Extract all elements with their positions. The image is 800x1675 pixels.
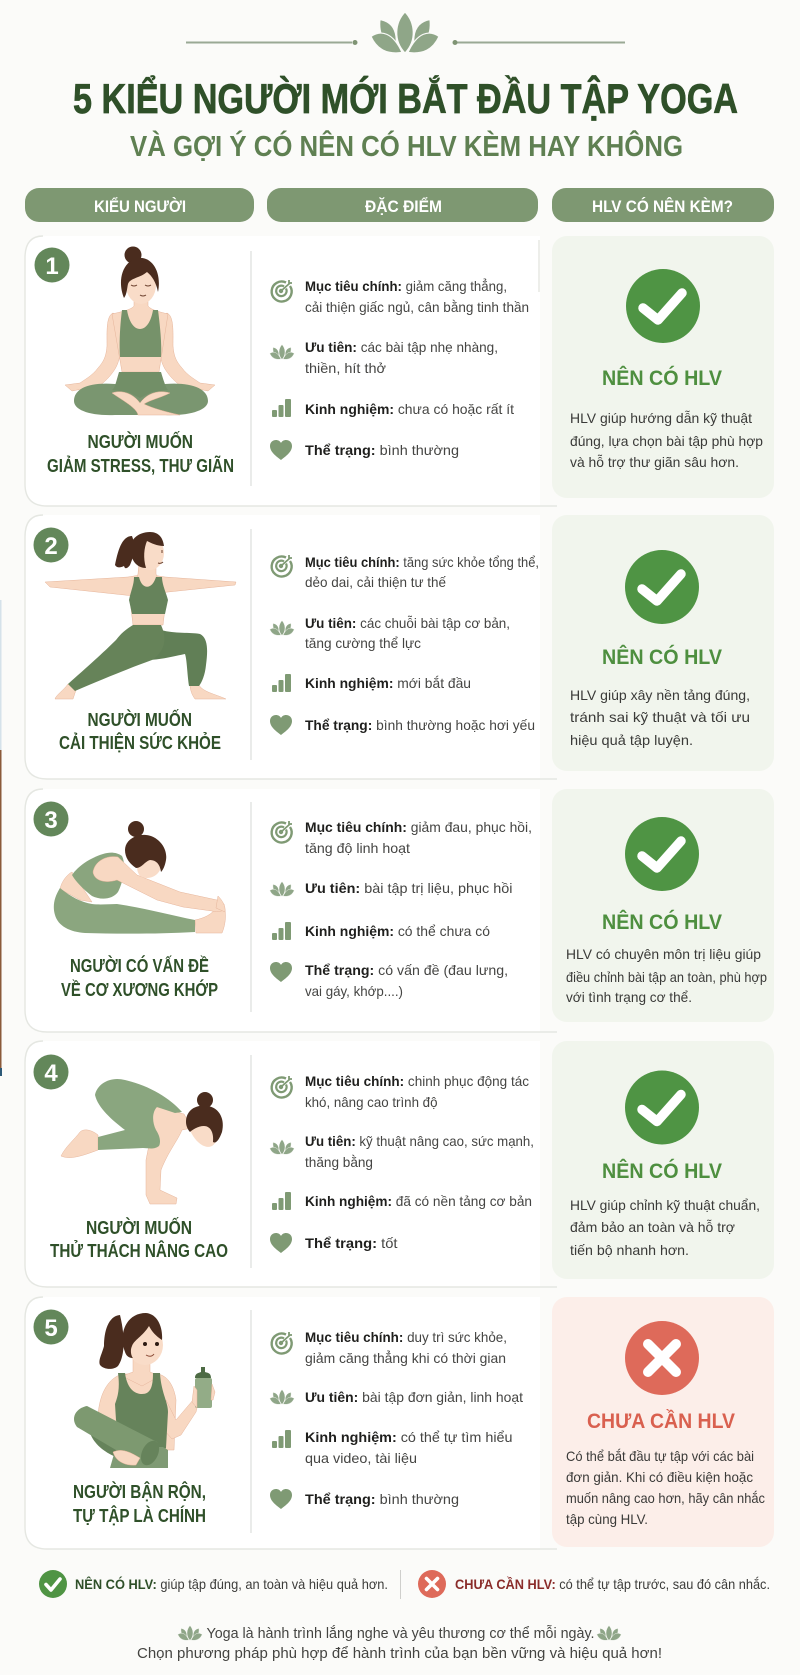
feature: thể trạng [270,1233,398,1253]
verdict panel: nên có HLV: đúng, lựa chọn bài tập phù hợp [570,433,763,449]
column header: đặc điểm [267,188,538,222]
verdict panel: nên có HLV: HLV giúp chỉnh kỹ thuật chuẩn, [570,1197,760,1213]
card background [25,515,557,779]
verdict panel: nên có HLV [552,789,774,1022]
column header: đặc điểm: ĐẶC ĐIỂM [365,197,442,216]
persona title: VỀ CƠ XƯƠNG KHỚP [61,979,218,1000]
subtitle: VÀ GỢI Ý CÓ NÊN CÓ HLV KÈM HAY KHÔNG [130,129,683,163]
verdict panel: nên có HLV: tiến bộ nhanh hơn. [570,1242,689,1258]
feature: mục tiêu chính: tăng độ linh hoạt [305,840,410,856]
feature: kinh nghiệm: Kinh nghiệm: đã có nền tảng cơ bản [305,1193,532,1209]
panel: row 4 [25,1041,774,1287]
feature: mục tiêu chính: Mục tiêu chính: giảm căng thẳng, [305,277,507,294]
persona title [47,431,234,476]
number badge 2: 2 [44,533,58,560]
closing message [137,1625,662,1662]
feature: thể trạng [270,440,459,460]
verdict panel: chưa cần HLV: muốn nâng cao hơn, hãy cân nhắc [566,1490,765,1506]
verdict panel: nên có HLV: và hỗ trợ thư giãn sâu hơn. [570,454,739,470]
verdict panel: nên có HLV: NÊN CÓ HLV [602,1159,722,1183]
feature: kinh nghiệm: Kinh nghiệm: có thể tự tìm hiểu [305,1429,512,1445]
legend: nên có HLV [39,1570,388,1598]
feature: ưu tiên: Ưu tiên: bài tập trị liệu, phục hồi [305,880,512,896]
verdict panel: nên có HLV [552,515,774,771]
feature: ưu tiên: thăng bằng [305,1154,373,1170]
feature: mục tiêu chính: khó, nâng cao trình độ [305,1094,438,1110]
feature: ưu tiên [270,1133,534,1170]
feature: mục tiêu chính: Mục tiêu chính: giảm đau, phục hồi, [305,819,532,835]
feature: thể trạng [270,715,535,735]
feature: ưu tiên [270,615,510,651]
persona title [61,955,218,1000]
card background [25,1041,557,1287]
number badge 4: 4 [44,1060,58,1087]
feature: thể trạng: vai gáy, khớp....) [305,983,403,999]
feature: thể trạng: Thể trạng: bình thường [305,1491,459,1507]
feature: mục tiêu chính [272,554,539,590]
verdict panel: chưa cần HLV: đơn giản. Khi có điều kiện hoặc [566,1469,753,1485]
card background [25,789,557,1032]
feature: mục tiêu chính: Mục tiêu chính: duy trì sức khỏe, [305,1329,507,1345]
number badge 4 [34,1054,68,1090]
verdict panel: nên có HLV: HLV giúp hướng dẫn kỹ thuật [570,410,752,426]
feature: ưu tiên: thiền, hít thở [305,360,386,376]
column header: HLV có nên kèm [552,188,774,222]
persona title [50,1217,228,1261]
feature: ưu tiên: Ưu tiên: các bài tập nhẹ nhàng, [305,339,498,355]
persona title: GIẢM STRESS, THƯ GIÃN [47,455,234,476]
feature: kinh nghiệm: qua video, tài liệu [305,1450,417,1466]
legend: chưa cần HLV [418,1570,770,1598]
number badge 2 [34,528,68,562]
feature: ưu tiên: Ưu tiên: kỹ thuật nâng cao, sức mạnh, [305,1133,534,1149]
verdict panel: nên có HLV: với tình trạng cơ thể. [566,989,692,1005]
verdict panel: nên có HLV: đảm bảo an toàn và hỗ trợ [570,1219,735,1235]
persona title [59,709,221,753]
feature: mục tiêu chính: Mục tiêu chính: chinh phục động tác [305,1073,529,1089]
verdict panel: nên có HLV: tránh sai kỹ thuật và tối ưu [570,709,750,725]
illustration: warrior pose [45,532,236,699]
panel: row 3 [25,789,774,1032]
feature: thể trạng [270,1489,459,1509]
closing message: Chọn phương pháp phù hợp để hành trình của bạn bền vững và hiệu quả hơn! [137,1645,662,1662]
feature: thể trạng: Thể trạng: tốt [305,1235,398,1251]
feature: mục tiêu chính: cải thiện giấc ngủ, cân bằng tinh thần [305,299,529,315]
feature: kinh nghiệm [272,1429,512,1466]
column header: HLV có nên kèm: HLV CÓ NÊN KÈM? [592,197,733,216]
feature: mục tiêu chính [272,1073,529,1110]
illustration: woman with mat and bottle [74,1313,215,1468]
feature: ưu tiên: Ưu tiên: các chuỗi bài tập cơ bản, [305,615,510,631]
feature: ưu tiên: tăng cường thể lực [305,635,421,651]
verdict panel: nên có HLV: NÊN CÓ HLV [602,910,722,934]
verdict panel: nên có HLV [552,1041,774,1279]
persona title: NGƯỜI CÓ VẤN ĐỀ [70,955,209,976]
verdict panel: nên có HLV: HLV có chuyên môn trị liệu giúp [566,946,761,962]
feature: ưu tiên [270,339,498,376]
feature: mục tiêu chính: giảm căng thẳng khi có thời gian [305,1349,506,1366]
persona title: NGƯỜI MUỐN [88,431,193,452]
number badge 5 [34,1310,68,1344]
feature: thể trạng: Thể trạng: bình thường hoặc hơi yếu [305,717,535,733]
verdict panel: chưa cần HLV [552,1297,774,1547]
feature: thể trạng: Thể trạng: có vấn đề (đau lưng, [305,962,508,978]
verdict panel: chưa cần HLV: CHƯA CẦN HLV [587,1410,735,1433]
feature: mục tiêu chính [272,1329,507,1366]
legend: chưa cần HLV: CHƯA CẦN HLV: có thể tự tập trước, sau đó cân nhắc. [455,1576,770,1592]
feature: thể trạng: Thể trạng: bình thường [305,442,459,458]
illustration: crow pose [61,1079,223,1204]
persona title: THỬ THÁCH NÂNG CAO [50,1240,228,1261]
persona title: TỰ TẬP LÀ CHÍNH [73,1505,206,1526]
feature: mục tiêu chính [272,819,532,856]
column header: kiểu người: KIỂU NGƯỜI [94,197,186,216]
persona title: NGƯỜI MUỐN [86,1217,192,1238]
verdict panel: nên có HLV: điều chỉnh bài tập an toàn, phù hợp [566,969,767,985]
number badge 1: 1 [45,253,59,280]
legend: nên có HLV: NÊN CÓ HLV: giúp tập đúng, an toàn và hiệu quả hơn. [75,1575,388,1592]
feature: kinh nghiệm: Kinh nghiệm: có thể chưa có [305,923,490,939]
card background [25,236,557,506]
feature: thể trạng [270,962,508,999]
feature: mục tiêu chính [272,277,529,315]
feature: ưu tiên: Ưu tiên: bài tập đơn giản, linh hoạt [305,1389,523,1405]
feature: mục tiêu chính: Mục tiêu chính: tăng sức khỏe tổng thể, [305,554,539,570]
verdict panel: nên có HLV: hiệu quả tập luyện. [570,732,693,748]
persona title: NGƯỜI MUỐN [88,709,192,730]
number badge 1 [34,248,70,282]
verdict panel: nên có HLV: NÊN CÓ HLV [602,366,722,390]
verdict panel: nên có HLV: HLV giúp xây nền tảng đúng, [570,687,750,703]
persona title: NGƯỜI BẬN RỘN, [73,1481,206,1502]
verdict panel: nên có HLV: NÊN CÓ HLV [602,645,722,669]
illustration: meditation pose [65,246,215,415]
feature: kinh nghiệm: Kinh nghiệm: chưa có hoặc rất ít [305,401,514,417]
verdict panel: nên có HLV [552,236,774,498]
column header: kiểu người [25,188,254,222]
number badge 3: 3 [44,807,58,834]
number badge 5: 5 [44,1315,58,1342]
number badge 3 [34,802,68,836]
panel: row 2 [25,515,774,779]
panel: row 1 [25,236,774,506]
header ornament: lotus with lines [186,12,625,53]
feature: kinh nghiệm: Kinh nghiệm: mới bắt đầu [305,675,471,691]
persona title: CẢI THIỆN SỨC KHỎE [59,732,221,753]
illustration: seated forward fold [54,821,225,934]
panel: row 5 [25,1297,774,1549]
feature: mục tiêu chính: dẻo dai, cải thiện tư thế [305,574,446,590]
persona title [73,1481,206,1526]
verdict panel: chưa cần HLV: tập cùng HLV. [566,1511,648,1527]
verdict panel: chưa cần HLV: Có thể bắt đầu tự tập với các bài [566,1448,754,1464]
card background [25,1297,557,1549]
closing message: Yoga là hành trình lắng nghe và yêu thương cơ thể mỗi ngày. [206,1625,594,1642]
